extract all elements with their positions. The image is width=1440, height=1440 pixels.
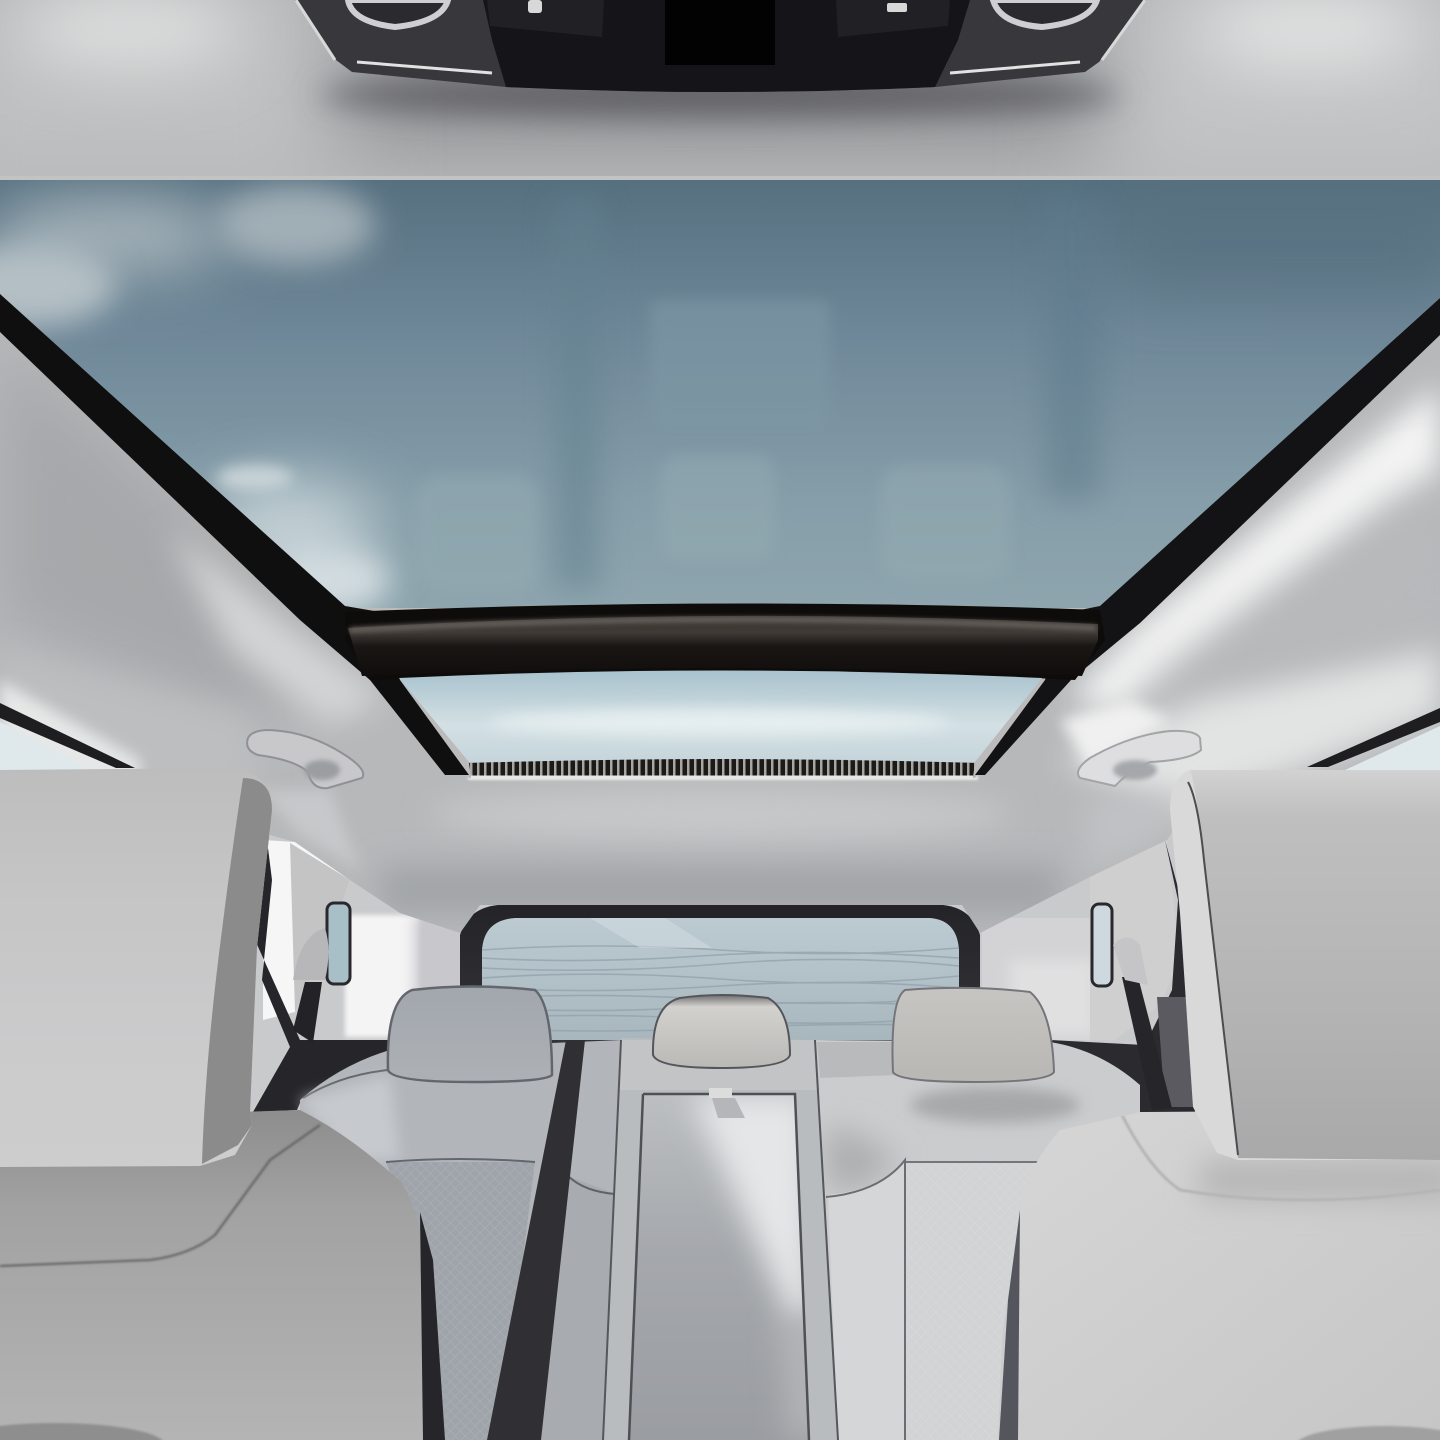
centre seat section — [603, 1038, 838, 1440]
icon: left reading lamp — [348, 0, 448, 27]
rear seat backrests — [300, 1040, 1140, 1440]
dark seat back strip, right — [1050, 840, 1195, 1112]
overhead console — [295, 0, 1146, 92]
seat fabric, bottom right — [1295, 1426, 1440, 1440]
side window, left — [0, 703, 135, 772]
left pillar — [263, 840, 350, 1020]
grab handle, right — [1078, 731, 1201, 786]
seat belt, right pillar — [1122, 977, 1172, 1110]
roof cross bar — [345, 603, 1105, 680]
reflections of the seats — [415, 200, 1440, 590]
left seat upper highlight — [300, 1075, 400, 1160]
right pillar — [1090, 840, 1180, 1040]
rear glass section — [399, 670, 1042, 777]
rear cabin walls and pillars — [250, 820, 1195, 1120]
top ceiling panel — [0, 0, 1440, 176]
left rear side bolster — [530, 1176, 616, 1440]
black glass frame, left — [0, 294, 469, 775]
front seat, right — [999, 1110, 1440, 1440]
right rear fabric insert — [905, 1162, 1052, 1440]
dark seat back strip, left — [253, 840, 400, 1112]
left rear seat — [300, 1040, 622, 1440]
rear headrest, right — [892, 988, 1054, 1082]
side window, right — [1307, 708, 1440, 772]
comb strip at rear of roof — [469, 759, 975, 777]
rear window — [460, 905, 980, 1045]
front seat, left — [0, 1110, 445, 1440]
front headrest, left — [0, 768, 272, 1167]
black glass frame, right — [975, 298, 1440, 775]
seat side edge, right — [999, 1210, 1020, 1440]
seat belt guide, right — [1113, 938, 1148, 985]
clouds in upper left — [0, 185, 375, 327]
seat belt guide, left — [293, 928, 328, 980]
rear seat belt — [487, 1040, 585, 1440]
right rear side bolster — [828, 1162, 905, 1440]
left white lit wall — [345, 915, 420, 1037]
quarter window, right — [1092, 904, 1112, 986]
right rear seat — [815, 1040, 1140, 1440]
quarter window, left — [327, 903, 350, 984]
front headrest, right — [1170, 770, 1440, 1160]
seat belt, left pillar — [293, 982, 322, 1043]
rear headrest, centre — [653, 995, 790, 1068]
rear headrest, left — [388, 986, 552, 1082]
headliner — [0, 346, 1440, 933]
grab handle, left — [247, 730, 363, 788]
seat side edge, left — [420, 1212, 445, 1440]
cloud at lower left — [205, 465, 390, 614]
seat fabric, bottom left — [0, 1423, 165, 1440]
seat seam, left — [0, 1125, 320, 1266]
seat seam, right — [1122, 1115, 1440, 1200]
icon: console button glyphs — [528, 0, 907, 13]
right wall — [982, 918, 1097, 1040]
left rear fabric insert — [386, 1159, 535, 1440]
icon: right reading lamp — [993, 0, 1097, 27]
glass top seal — [0, 176, 1440, 180]
seat release tab — [709, 1088, 732, 1098]
panoramic glass roof — [0, 180, 1440, 614]
